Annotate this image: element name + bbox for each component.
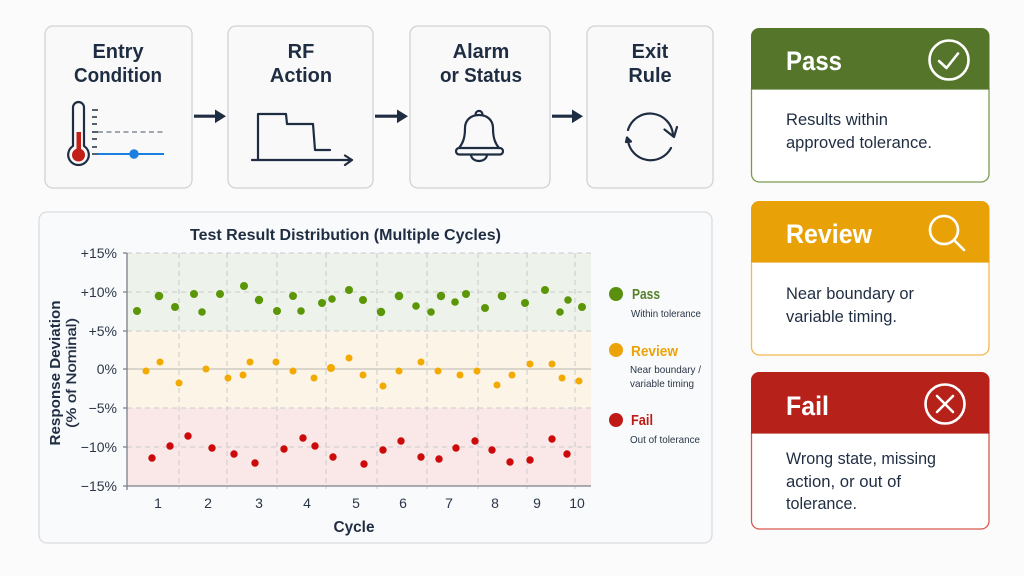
card heading: fail: Fail (786, 391, 829, 421)
x axis tick labels: 9 (533, 495, 541, 511)
legend item: review: Review (631, 344, 679, 360)
arrow: RF action to alarm (375, 110, 408, 123)
heading: entry condition: Condition (74, 65, 162, 87)
heading: alarm or status: or Status (440, 65, 522, 87)
legend item: review (609, 343, 701, 390)
data points: fail (148, 432, 571, 468)
legend item: pass (609, 287, 701, 320)
legend item: fail: Out of tolerance (630, 434, 700, 446)
legend item: pass: Within tolerance (631, 308, 701, 320)
card description: pass: Results within (786, 110, 888, 129)
card description: review: variable timing. (786, 307, 897, 326)
x axis tick labels: 8 (491, 495, 499, 511)
heading: RF action: RF (288, 41, 314, 63)
icon: bell (456, 111, 503, 161)
icon: check circle (930, 40, 968, 80)
heading: exit rule: Exit (632, 41, 669, 63)
y axis tick labels: +15% (81, 245, 117, 261)
y axis title: Response Deviation (48, 300, 64, 446)
chart title: Test Result Distribution (Multiple Cycles) (190, 227, 501, 244)
scatter plot bands and grid (123, 253, 591, 490)
x axis tick labels: 5 (352, 495, 360, 511)
card description: fail: tolerance. (786, 494, 857, 513)
heading: alarm or status: Alarm (453, 41, 509, 63)
y axis tick labels (81, 245, 117, 494)
arrow: alarm to exit rule (552, 110, 583, 123)
x axis tick labels: 6 (399, 495, 407, 511)
legend item: fail (609, 413, 700, 446)
panel: review status card (751, 201, 990, 355)
y axis tick labels: 0% (97, 361, 117, 377)
x axis tick labels: 10 (569, 495, 585, 511)
y axis tick labels: +5% (89, 323, 117, 339)
legend item: review: variable timing (630, 378, 694, 390)
panel: pass status card (751, 28, 990, 182)
legend (609, 287, 701, 446)
panel: fail status card (751, 372, 990, 529)
heading: exit rule: Rule (628, 65, 672, 87)
x axis tick labels: 1 (154, 495, 162, 511)
x axis tick labels: 7 (445, 495, 453, 511)
card description: fail: action, or out of (786, 472, 901, 491)
x axis title: Cycle (334, 519, 375, 536)
heading: RF action: Action (270, 65, 332, 87)
arrow: entry to RF action (194, 110, 226, 123)
x axis tick labels: 2 (204, 495, 212, 511)
y axis tick labels: −10% (81, 439, 117, 455)
legend item: review: Near boundary / (630, 364, 701, 376)
icon: magnifier (930, 216, 964, 250)
card heading: pass: Pass (786, 46, 842, 76)
icon: thermometer with setpoint lines (68, 102, 164, 165)
icon: cycle arrows (626, 114, 677, 160)
card description: pass: approved tolerance. (786, 133, 932, 152)
card description: fail: Wrong state, missing (786, 449, 936, 468)
panel: entry condition (45, 26, 192, 188)
card heading: review: Review (786, 219, 873, 249)
panel: exit rule (587, 26, 713, 188)
panel: test result distribution chart (39, 212, 712, 543)
x axis tick labels (154, 495, 585, 511)
legend item: fail: Fail (631, 413, 653, 429)
x axis tick labels: 4 (303, 495, 311, 511)
y axis title: (% of Nominal) (63, 318, 79, 428)
x axis tick labels: 3 (255, 495, 263, 511)
panel: RF action (228, 26, 373, 188)
icon: stepped RF power chart (252, 114, 352, 165)
icon: cross circle (926, 384, 964, 424)
y axis title (48, 300, 79, 446)
y axis tick labels: −15% (81, 478, 117, 494)
legend item: pass: Pass (632, 287, 660, 303)
data points: pass (133, 282, 586, 316)
heading: entry condition: Entry (92, 41, 144, 63)
y axis tick labels: +10% (81, 284, 117, 300)
data points: review (142, 354, 582, 390)
panel: alarm or status (410, 26, 550, 188)
y axis tick labels: −5% (89, 400, 117, 416)
card description: review: Near boundary or (786, 284, 914, 303)
